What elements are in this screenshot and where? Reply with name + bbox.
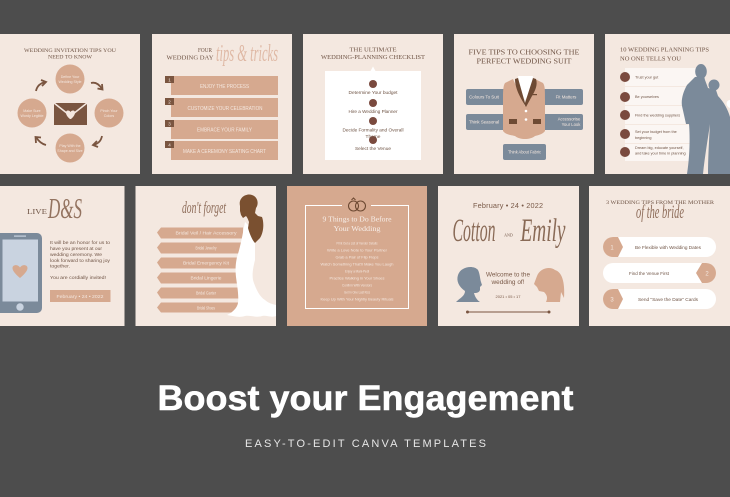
things list: Enjoy a Mani-Pedi <box>345 268 369 274</box>
tips list: Trust your gut <box>635 76 659 80</box>
things list: Get In One Last Kiss <box>344 290 370 294</box>
numbered bars <box>165 76 278 160</box>
heading: nine things <box>322 214 392 233</box>
tip circles: Shape and Size <box>57 149 83 153</box>
decorative frame <box>306 206 408 308</box>
things list: Grab a Pair of Flip Flops <box>336 254 379 260</box>
icon: rings <box>348 198 366 211</box>
heading: wedding suit: FIVE TIPS TO CHOOSING THE <box>468 48 580 56</box>
tip circles: Define Your <box>61 75 80 79</box>
things list: Print Out a List of Vendor Details <box>336 240 378 246</box>
tag list: Bridal Veil / Hair Accessory <box>176 230 237 236</box>
tag list: Bridal Shoes <box>197 306 216 310</box>
tips list: Be yourselves <box>635 95 659 99</box>
heading: nine things: 9 Things to Do Before <box>322 214 392 224</box>
heading: ten tips <box>620 46 709 62</box>
heading: ultimate checklist: THE ULTIMATE <box>350 48 397 54</box>
heading: ultimate checklist <box>321 48 425 61</box>
tip circles: Make Sure <box>23 109 41 113</box>
heading: ten tips: NO ONE TELLS YOU <box>620 56 681 62</box>
invitation text: wedding ceremony. We <box>50 252 103 257</box>
tip labels: Fit Matters <box>556 94 577 100</box>
date button: February • 24 • 2022 <box>56 294 104 300</box>
tip labels: Colours To Suit <box>469 94 500 100</box>
checklist card <box>325 66 421 160</box>
script names: Cotton <box>452 213 496 249</box>
heading: tips from mother: 3 WEDDING TIPS FROM THE MOTHER <box>606 200 714 206</box>
tip labels: Your Look <box>562 122 581 127</box>
heading: wedding suit: PERFECT WEDDING SUIT <box>476 56 572 66</box>
script heading: don't forget <box>182 198 227 217</box>
tip circles: Wordy Legible <box>21 114 43 118</box>
tip circles <box>18 64 124 162</box>
tip labels: Think Seasonal <box>469 120 499 124</box>
timeline rule <box>466 311 550 313</box>
panel: cotton and emily <box>438 186 579 326</box>
and label: AND <box>504 232 513 238</box>
heading: nine things: Your Wedding <box>334 224 381 233</box>
invitation text: have you present at our <box>50 246 103 251</box>
tips list: and take your time in planning <box>635 152 686 156</box>
panel: live invitation <box>0 186 124 326</box>
checklist card: Select the Venue <box>355 146 391 152</box>
things list: Keep Up With Your Nightly Beauty Rituals <box>320 296 394 302</box>
tips list: Dream big, educate yourself, <box>635 146 684 150</box>
tag list: Bridal Emergency Kit <box>183 260 230 266</box>
tips list: Find the wedding suppliers <box>635 114 680 118</box>
invitation text: It will be an honor for us to <box>50 240 111 245</box>
date: February • 24 • 2022 <box>473 201 543 210</box>
pills: Find the Venue First <box>629 271 670 276</box>
silhouette: bride profile <box>534 268 564 302</box>
pills: 2 <box>705 272 709 278</box>
welcome text <box>486 272 531 286</box>
tips list <box>620 68 699 161</box>
numbered bars: CUSTOMIZE YOUR CELEBRATION <box>188 106 263 112</box>
icon: suit jacket <box>503 76 545 139</box>
script heading: of the bride: of the bride <box>636 202 684 223</box>
invitation text: together. <box>50 264 70 268</box>
tip circles: Pinch Your <box>100 109 118 113</box>
numbered bars: MAKE A CEREMONY SEATING CHART <box>183 149 266 155</box>
icon: phone <box>0 233 42 313</box>
heading: four wedding day: WEDDING DAY <box>166 54 214 62</box>
pills: Be Flexible with Wedding Dates <box>635 245 702 250</box>
tag list <box>157 228 243 312</box>
heading: ultimate checklist: WEDDING-PLANNING CHECKLIST <box>321 55 425 61</box>
tip labels: Think About Fabric <box>508 150 542 154</box>
wedding date small: 2021 • 05 • 17 <box>496 294 521 299</box>
numbered bars: 2 <box>168 100 171 104</box>
subtitle: EASY-TO-EDIT CANVA TEMPLATES <box>245 438 486 450</box>
silhouette: bride <box>227 194 276 317</box>
invitation text: look forward to sharing joy <box>50 258 111 263</box>
checklist card: Determine Your budget <box>348 90 398 96</box>
tip labels: Accessorise <box>558 116 581 122</box>
tip circles: Wedding Style <box>58 80 82 84</box>
tag list: Bridal Jewelry <box>196 246 217 250</box>
panel: don't forget <box>136 186 276 326</box>
things list: Confirm With Vendors <box>342 282 372 288</box>
welcome text: Welcome to the <box>486 272 531 278</box>
heading: invitation tips: WEDDING INVITATION TIPS YOU <box>24 48 116 54</box>
main title: Boost your Engagement <box>158 379 574 418</box>
heading: four wedding day <box>166 47 214 62</box>
panel: mother of the bride <box>589 186 730 326</box>
silhouette: groom <box>456 267 482 302</box>
pills: Send "Save the Date" Cards <box>638 297 699 302</box>
script names: Emily <box>520 213 566 249</box>
numbered bars: 1 <box>168 78 171 82</box>
things list: Write a Love Note to Your Partner <box>327 248 388 252</box>
welcome text: wedding of! <box>490 280 525 286</box>
things list: Practice Walking in Your Shoes <box>330 276 385 280</box>
invitation text: You are cordially invited! <box>50 275 106 280</box>
numbered bars: EMBRACE YOUR FAMILY <box>197 128 253 134</box>
panel: ten planning tips <box>605 34 730 174</box>
invitation text <box>50 240 111 280</box>
tip circles: Colors <box>104 114 114 118</box>
tip labels <box>466 89 583 160</box>
icon: envelope <box>54 103 87 125</box>
cycle arrows <box>36 80 102 147</box>
panel: wedding suit tips <box>454 34 594 174</box>
tips list: Set your budget from the <box>635 130 677 134</box>
tag list: Bridal Garter <box>196 290 216 296</box>
heading: four wedding day: FOUR <box>198 47 213 54</box>
panel: wedding invitation tips <box>0 34 140 174</box>
things list <box>320 240 394 302</box>
heading: live: LIVE <box>27 207 47 216</box>
numbered bars: 4 <box>168 142 171 148</box>
numbered bars: 3 <box>168 122 171 126</box>
checklist card: Decide Formality and Overall <box>342 128 404 134</box>
script initials: D&S <box>47 194 82 225</box>
tag list: Bridal Lingerie <box>190 276 222 280</box>
silhouette: couple <box>682 64 730 174</box>
pills <box>603 237 716 309</box>
things list: Watch Something That'll Make You Laugh <box>320 262 394 266</box>
heading: invitation tips <box>24 48 116 60</box>
heading: ten tips: 10 WEDDING PLANNING TIPS <box>620 46 709 54</box>
script heading: tips and tricks: tips & tricks <box>216 41 278 67</box>
checklist card: Theme <box>366 134 381 140</box>
heading: wedding suit <box>468 48 580 66</box>
checklist card: Hire a Wedding Planner <box>348 109 398 115</box>
tip circles: Play With the <box>59 144 81 148</box>
pills: 3 <box>610 298 614 304</box>
tips list: beginning <box>635 136 651 140</box>
panel: wedding day tips and tricks <box>152 34 292 174</box>
heading: invitation tips: NEED TO KNOW <box>48 54 93 60</box>
panel: planning checklist <box>303 34 443 174</box>
panel: nine things <box>287 186 427 326</box>
numbered bars: ENJOY THE PROCESS <box>200 84 250 90</box>
pills: 1 <box>610 246 614 252</box>
